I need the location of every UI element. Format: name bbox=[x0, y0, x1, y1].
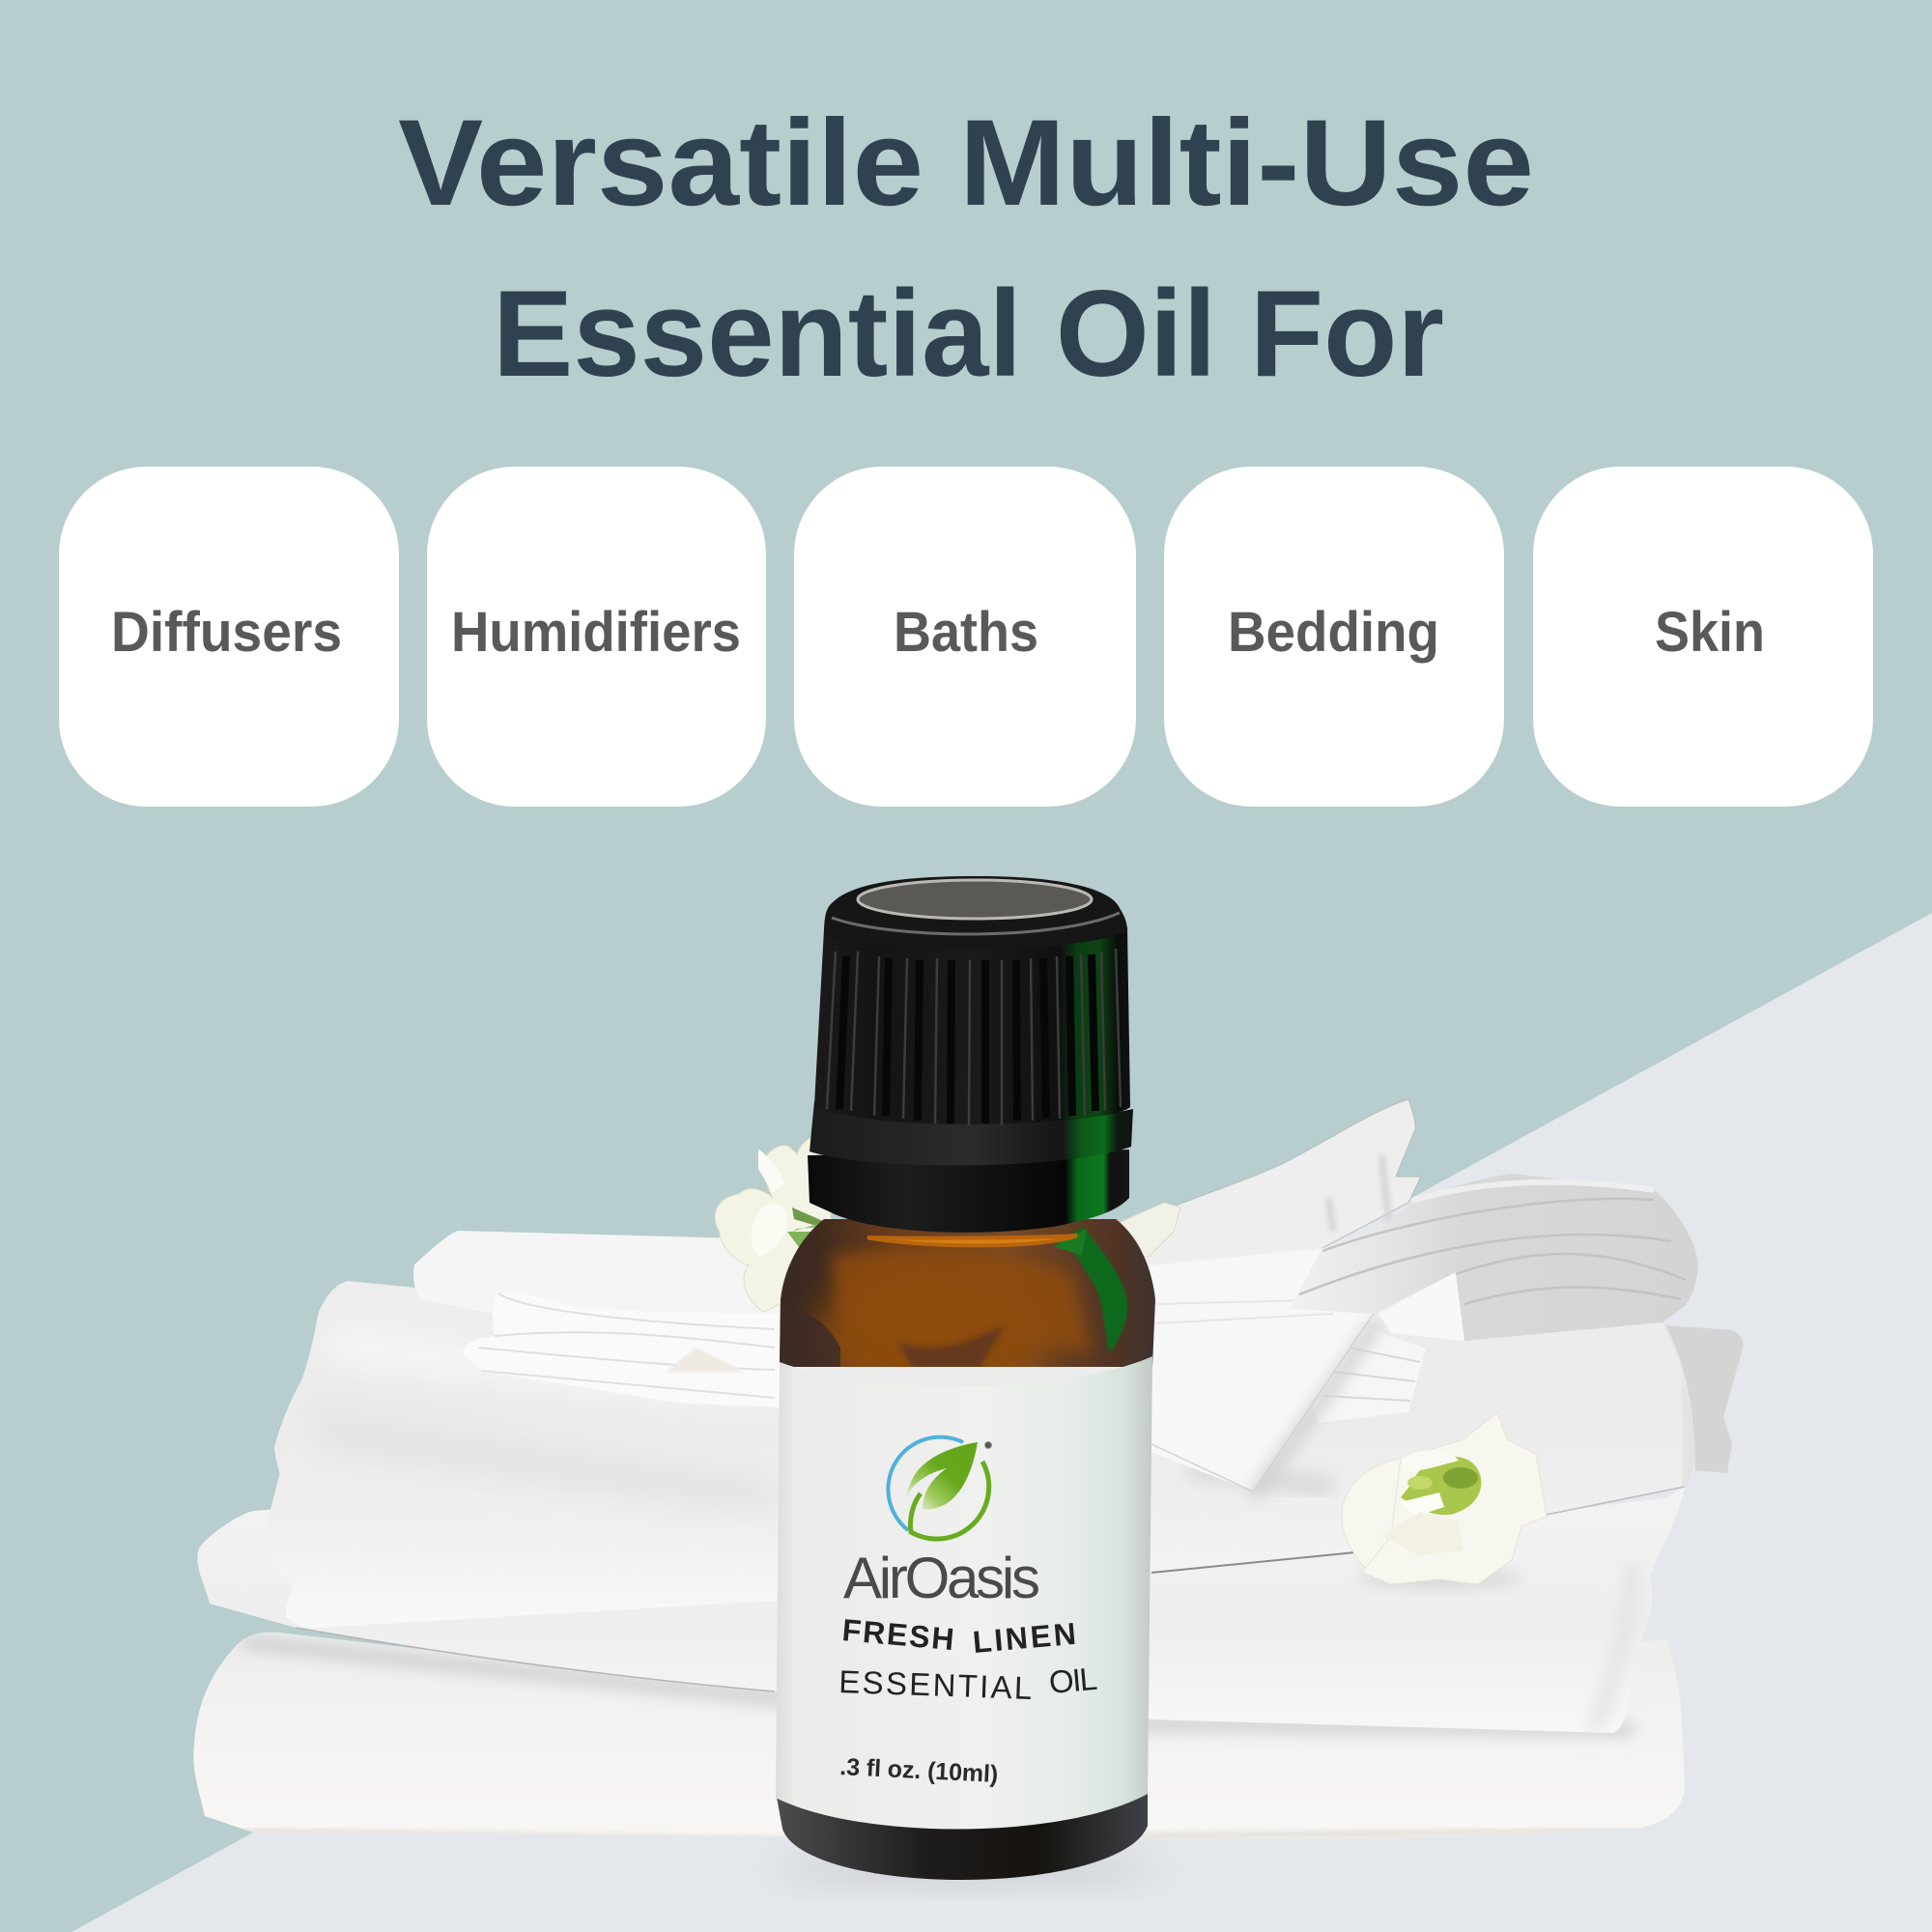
flower shadow bbox=[1357, 1570, 1521, 1587]
card: humidifiers bbox=[427, 467, 766, 807]
cap seal disc bbox=[858, 880, 1092, 919]
product name: LINEN bbox=[971, 1616, 1077, 1660]
grey rolled pillow bbox=[1290, 1174, 1698, 1341]
bottle ground shadow bbox=[773, 1858, 1159, 1881]
logo leaf bbox=[905, 1442, 978, 1509]
product type bbox=[838, 1661, 1098, 1706]
flower green centre bbox=[1381, 1450, 1481, 1555]
flower fragment right of cap bbox=[1121, 1203, 1180, 1261]
top flap right bbox=[1125, 1099, 1421, 1294]
card: bedding: Bedding bbox=[1228, 601, 1439, 664]
grey side fold bbox=[1665, 1325, 1744, 1473]
logo blue arc bbox=[888, 1437, 963, 1530]
card: skin: Skin bbox=[1655, 601, 1765, 664]
amber glass shoulder bbox=[780, 1219, 1155, 1367]
logo bbox=[888, 1437, 991, 1539]
second sheet bbox=[197, 1487, 1685, 1733]
card: diffusers: Diffusers bbox=[111, 601, 342, 664]
card: bedding bbox=[1164, 467, 1504, 807]
card: diffusers bbox=[59, 467, 399, 807]
bottle base bbox=[776, 1787, 1148, 1880]
product type: ESSENTIAL bbox=[838, 1663, 1033, 1706]
oil glint bbox=[867, 1236, 1077, 1245]
cap collar bbox=[810, 1101, 1133, 1165]
third sheet bbox=[265, 1256, 1695, 1628]
bottom sheet bbox=[193, 1633, 1685, 1840]
flower on linen bbox=[1342, 1412, 1547, 1587]
large flap right bbox=[1130, 1248, 1377, 1497]
title line 2: Essential Oil For bbox=[493, 265, 1444, 402]
card: skin bbox=[1533, 467, 1873, 807]
title line 1: Versatile Multi-Use bbox=[398, 94, 1534, 231]
petals bbox=[1342, 1412, 1547, 1584]
product name: FRESH bbox=[840, 1612, 955, 1657]
card: baths bbox=[794, 467, 1136, 807]
lower neck ring bbox=[808, 1150, 1129, 1233]
brand name: AirOasis bbox=[843, 1546, 1040, 1610]
white product label bbox=[776, 1356, 1152, 1830]
folded white linen stack bbox=[193, 1099, 1744, 1840]
registered mark bbox=[985, 1441, 991, 1449]
product name bbox=[840, 1612, 1077, 1660]
ribbed cap bbox=[814, 927, 1130, 1125]
title bbox=[398, 94, 1534, 402]
cap top bbox=[824, 876, 1127, 950]
essential oil bottle bbox=[773, 876, 1159, 1881]
card: humidifiers: Humidifiers bbox=[451, 601, 741, 664]
top pillowcase left bbox=[413, 1231, 802, 1328]
folded napkin left bbox=[462, 1291, 802, 1408]
card: baths: Baths bbox=[894, 601, 1038, 664]
cap ribs bbox=[827, 949, 1121, 1125]
flower behind bottle left bbox=[715, 1134, 840, 1312]
volume: .3 fl oz. (10ml) bbox=[839, 1753, 999, 1788]
product type: OIL bbox=[1047, 1661, 1098, 1700]
diagonal light panel bbox=[71, 913, 1932, 1932]
small folded pillow right bbox=[1294, 1323, 1426, 1423]
logo green arc bbox=[910, 1462, 989, 1539]
use-case cards bbox=[59, 467, 1873, 807]
